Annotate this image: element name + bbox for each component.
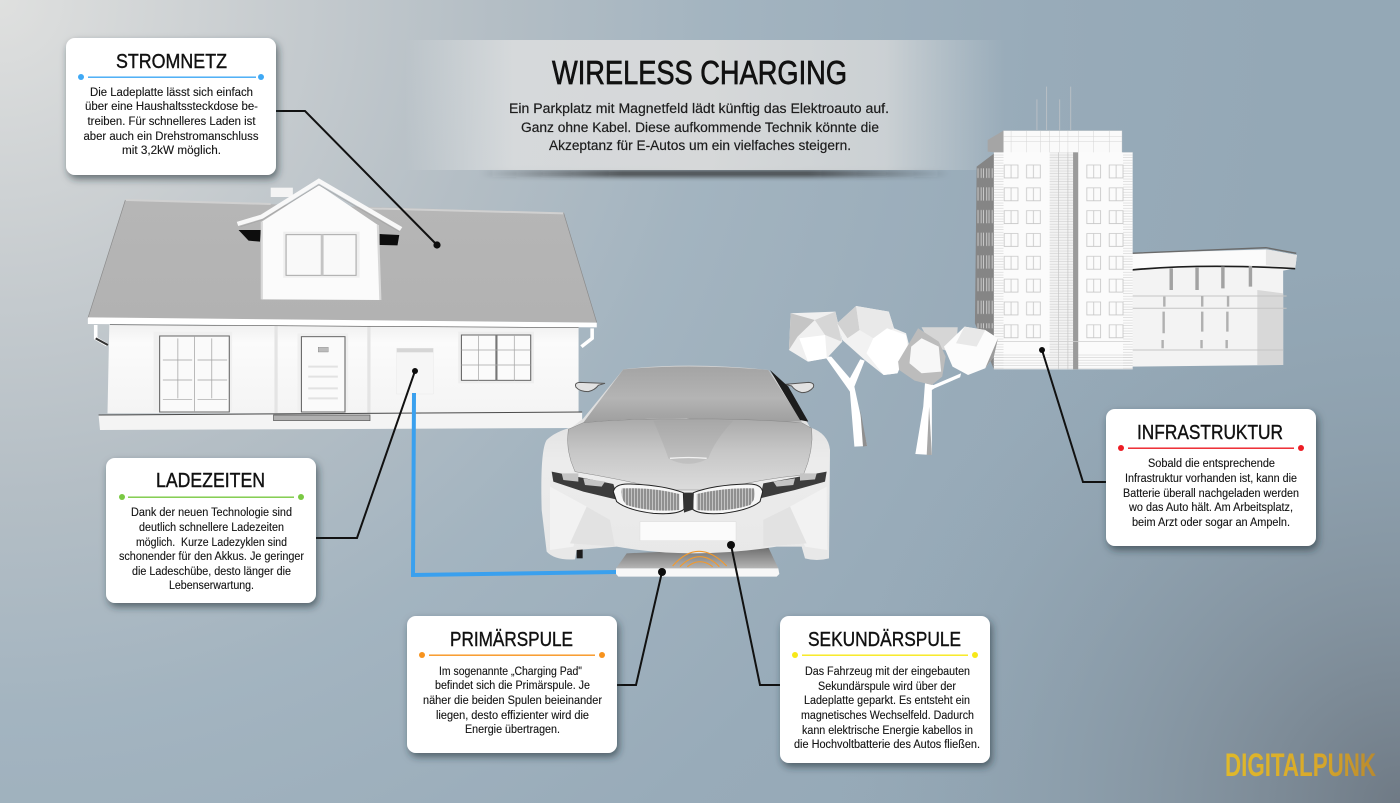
roof shadow [770,370,808,422]
wallbox [397,348,433,394]
hood [567,419,812,490]
title banner [405,40,1005,177]
banner plate [405,40,1005,170]
body text: wo das Auto hält. Am Arbeitsplatz, [1128,500,1293,514]
leader end dots [412,241,1045,576]
panel: ladezeiten [106,458,316,603]
charging pad [616,547,779,577]
title: WIRELESS CHARGING [552,54,847,91]
car [541,366,830,577]
body text: näher die beiden Spulen beieinander [423,693,602,707]
body text [794,664,980,751]
leader: sekundaerspule [731,545,780,685]
body text: magnetisches Wechselfeld. Dadurch [801,708,974,722]
hood bulge [653,419,733,464]
car body [541,366,830,560]
heading: SEKUNDÄRSPULE [808,628,961,651]
charging cable [413,393,616,575]
divider [792,652,978,658]
intro text: Akzeptanz für E-Autos um ein vielfaches steigern. [549,138,851,153]
body text: Lebenserwartung. [169,578,254,592]
divider [1118,445,1304,451]
divider [119,494,304,500]
panel: stromnetz [66,38,276,175]
panel: sekundaerspule [780,616,990,763]
leader: stromnetz [276,111,437,245]
panel: infrastruktur [1106,409,1316,546]
intro text: Ein Parkplatz mit Magnetfeld lädt künftig das Elektroauto auf. [509,101,889,116]
gutters [96,325,592,347]
body text: Ladeplatte geparkt. Es entsteht ein [804,693,970,707]
body text: Sobald die entsprechende [1148,456,1275,470]
body text: Im sogenannte „Charging Pad" [439,664,582,678]
doorstep [274,415,370,421]
tower front [994,152,1133,369]
tree right [898,327,998,455]
body text [84,85,258,157]
body text: Batterie überall nachgeladen werden [1123,486,1299,500]
banner shadow [480,170,950,177]
leader: ladezeiten [316,371,415,538]
body text: Energie übertragen. [465,722,560,736]
body text: möglich. Kurze Ladezyklen sind [136,535,287,549]
roof [88,200,597,323]
leader: infrastruktur [1042,350,1106,482]
body text: aber auch ein Drehstromanschluss [84,129,258,143]
body text [119,505,304,592]
body text: beim Arzt oder sogar an Ampeln. [1132,515,1290,529]
licence plate [640,522,736,541]
front door [297,333,348,412]
plinth [99,413,582,430]
body text: befindet sich die Primärspule. Je [435,678,590,692]
wheel [577,545,583,558]
body text: liegen, desto effizienter wird die [436,708,589,722]
heading: STROMNETZ [116,50,227,73]
body text: Infrastruktur vorhanden ist, kann die [1125,471,1297,485]
mirrors [575,382,814,393]
body text: Sekundärspule wird über der [818,679,956,693]
body text: Dank der neuen Technologie sind [131,505,292,519]
bumper intakes [550,487,827,550]
right headlight [760,472,827,498]
body text: mit 3,2kW möglich. [122,143,221,157]
divider [419,652,605,658]
heading: INFRASTRUKTUR [1137,421,1283,444]
body text: treiben. Für schnelleres Laden ist [88,114,256,128]
patio door [154,332,232,412]
low building [1128,248,1297,367]
house [88,181,597,430]
trees [789,306,998,455]
tree left [789,306,909,447]
panel: primaerspule [407,616,617,753]
left headlight [552,472,618,500]
walls [88,317,597,430]
dormer [237,181,401,300]
body text: deutlich schnellere Ladezeiten [139,520,284,534]
body text: Die Ladeplatte lässt sich einfach [90,85,253,99]
right window [458,332,534,383]
charging waves [673,551,727,567]
tower top [988,131,1004,153]
heading: PRIMÄRSPULE [450,628,573,651]
body text: schonender für den Akkus. Je geringer [119,549,304,563]
windshield [583,366,802,425]
body text [1123,456,1299,529]
leader: primaerspule [617,572,662,685]
leader lines [276,111,1106,685]
body text [423,664,602,736]
antennas [1037,87,1071,130]
heading: LADEZEITEN [156,469,265,492]
divider [78,74,264,80]
kidney grille [613,484,763,514]
body text: die Hochvoltbatterie des Autos fließen. [794,737,980,751]
tower side [975,152,996,369]
intro text [509,101,889,153]
body text: über eine Haushaltssteckdose be- [85,99,258,113]
body text: kann elektrische Energie kabellos in [802,723,973,737]
body text: die Ladeschübe, desto länger die [132,564,291,578]
office buildings [975,87,1297,369]
body text: Das Fahrzeug mit der eingebauten [805,664,970,678]
intro text: Ganz ohne Kabel. Diese aufkommende Technik könnte die [521,120,879,135]
